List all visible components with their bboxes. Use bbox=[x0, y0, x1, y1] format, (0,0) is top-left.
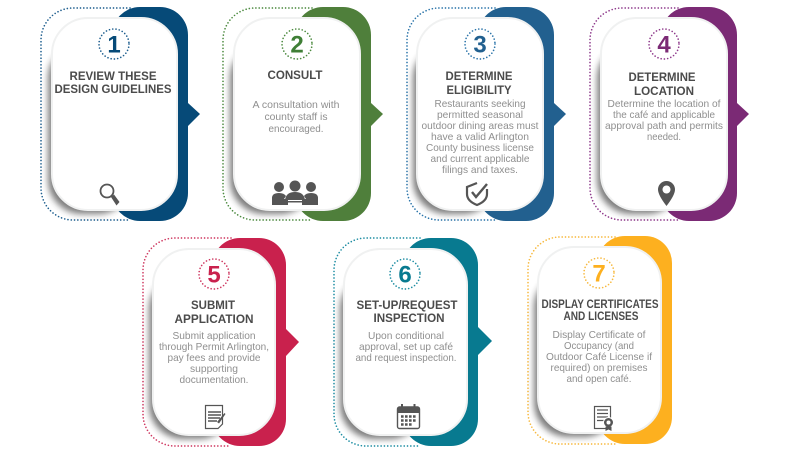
heading: determine eligibility: DETERMINE bbox=[446, 71, 513, 83]
heading: determine eligibility bbox=[446, 71, 513, 97]
text: consult description: encouraged. bbox=[268, 124, 324, 135]
text: display description: required) on premises bbox=[550, 363, 648, 374]
panel: step 5 submit application bbox=[143, 238, 299, 446]
step number 1: 1 bbox=[107, 32, 121, 58]
text: submit description: Submit application bbox=[172, 331, 256, 342]
text: consult description bbox=[252, 100, 340, 135]
step number 6: 6 bbox=[398, 262, 412, 288]
heading: display certificates and licenses: AND LICENSES bbox=[564, 311, 639, 323]
text: eligibility description: outdoor dining areas must bbox=[422, 121, 539, 132]
text: consult description: county staff is bbox=[264, 112, 328, 123]
step number 7: 7 bbox=[592, 260, 606, 288]
text: eligibility description: permitted seasonal bbox=[437, 110, 523, 121]
heading: determine eligibility: ELIGIBILITY bbox=[446, 85, 512, 97]
text: submit description: through Permit Arlington, bbox=[159, 342, 269, 353]
heading: review these design guidelines: REVIEW THESE bbox=[70, 71, 157, 83]
panel: step 7 display certificates and licenses bbox=[528, 236, 672, 444]
icon: calendar bbox=[398, 404, 420, 428]
panel: step 2 consult bbox=[223, 7, 383, 221]
text: eligibility description: filings and taxes. bbox=[442, 165, 518, 176]
heading: set-up request inspection bbox=[356, 300, 458, 325]
text: inspection description: and request inspection. bbox=[356, 353, 456, 364]
text: submit description bbox=[159, 331, 269, 386]
text: eligibility description: have a valid Arlington bbox=[431, 132, 529, 143]
heading: set-up request inspection: SET-UP/REQUEST bbox=[356, 300, 458, 312]
text: eligibility description: and current applicable bbox=[430, 154, 530, 165]
text: location description bbox=[605, 99, 723, 143]
text: display description: Display Certificate of bbox=[552, 330, 646, 341]
heading: determine location: LOCATION bbox=[634, 86, 694, 98]
text: eligibility description: County business license bbox=[426, 143, 534, 154]
heading: submit application: SUBMIT bbox=[191, 300, 235, 312]
panel: step 3 determine eligibility bbox=[407, 7, 566, 221]
panel: step 1 review these design guidelines bbox=[41, 7, 200, 221]
heading: set-up request inspection: INSPECTION bbox=[374, 313, 444, 325]
step number 3: 3 bbox=[473, 32, 487, 58]
icon: magnifying glass bbox=[100, 184, 120, 206]
icon: certificate with seal bbox=[594, 406, 614, 431]
text: inspection description: approval, set up café bbox=[359, 342, 453, 353]
icon: people at a table bbox=[272, 180, 318, 205]
step number 4: 4 bbox=[657, 32, 671, 58]
text: location description: approval path and permits bbox=[605, 121, 723, 132]
heading: consult: CONSULT bbox=[268, 70, 322, 82]
heading: display certificates and licenses: DISPLAY CERTIFICATES bbox=[542, 299, 659, 311]
text: submit description: documentation. bbox=[180, 375, 248, 386]
panel: step 4 determine location bbox=[590, 7, 749, 221]
text: consult description: A consultation with bbox=[252, 100, 340, 111]
heading: display certificates and licenses bbox=[542, 299, 659, 323]
icon: map pin bbox=[658, 181, 675, 206]
text: inspection description: Upon conditional bbox=[368, 331, 444, 342]
heading: submit application bbox=[174, 300, 254, 326]
step number 2: 2 bbox=[290, 32, 304, 58]
text: submit description: supporting bbox=[190, 364, 238, 375]
panel: step 6 set-up and request inspection bbox=[334, 238, 492, 446]
text: location description: needed. bbox=[647, 132, 681, 143]
text: inspection description bbox=[356, 331, 456, 364]
text: submit description: pay fees and provide bbox=[168, 353, 261, 364]
heading: determine location bbox=[628, 72, 696, 98]
text: eligibility description: Restaurants seeking bbox=[434, 99, 526, 110]
text: location description: the café and applicable bbox=[613, 110, 715, 121]
text: display description bbox=[546, 330, 652, 385]
heading: determine location: DETERMINE bbox=[628, 72, 696, 84]
text: display description: and open café. bbox=[566, 374, 632, 385]
text: display description: Outdoor Café License if bbox=[546, 352, 652, 363]
icon: shield with check bbox=[467, 183, 487, 205]
heading: submit application: APPLICATION bbox=[174, 314, 254, 326]
heading: review these design guidelines: DESIGN GUIDELINES bbox=[54, 84, 172, 96]
icon: document with pen bbox=[206, 406, 226, 428]
step number 5: 5 bbox=[207, 262, 221, 288]
text: display description: Occupancy (and bbox=[564, 341, 634, 352]
heading: review these design guidelines bbox=[54, 71, 172, 96]
text: eligibility description bbox=[422, 99, 539, 176]
text: location description: Determine the location of bbox=[608, 99, 721, 110]
